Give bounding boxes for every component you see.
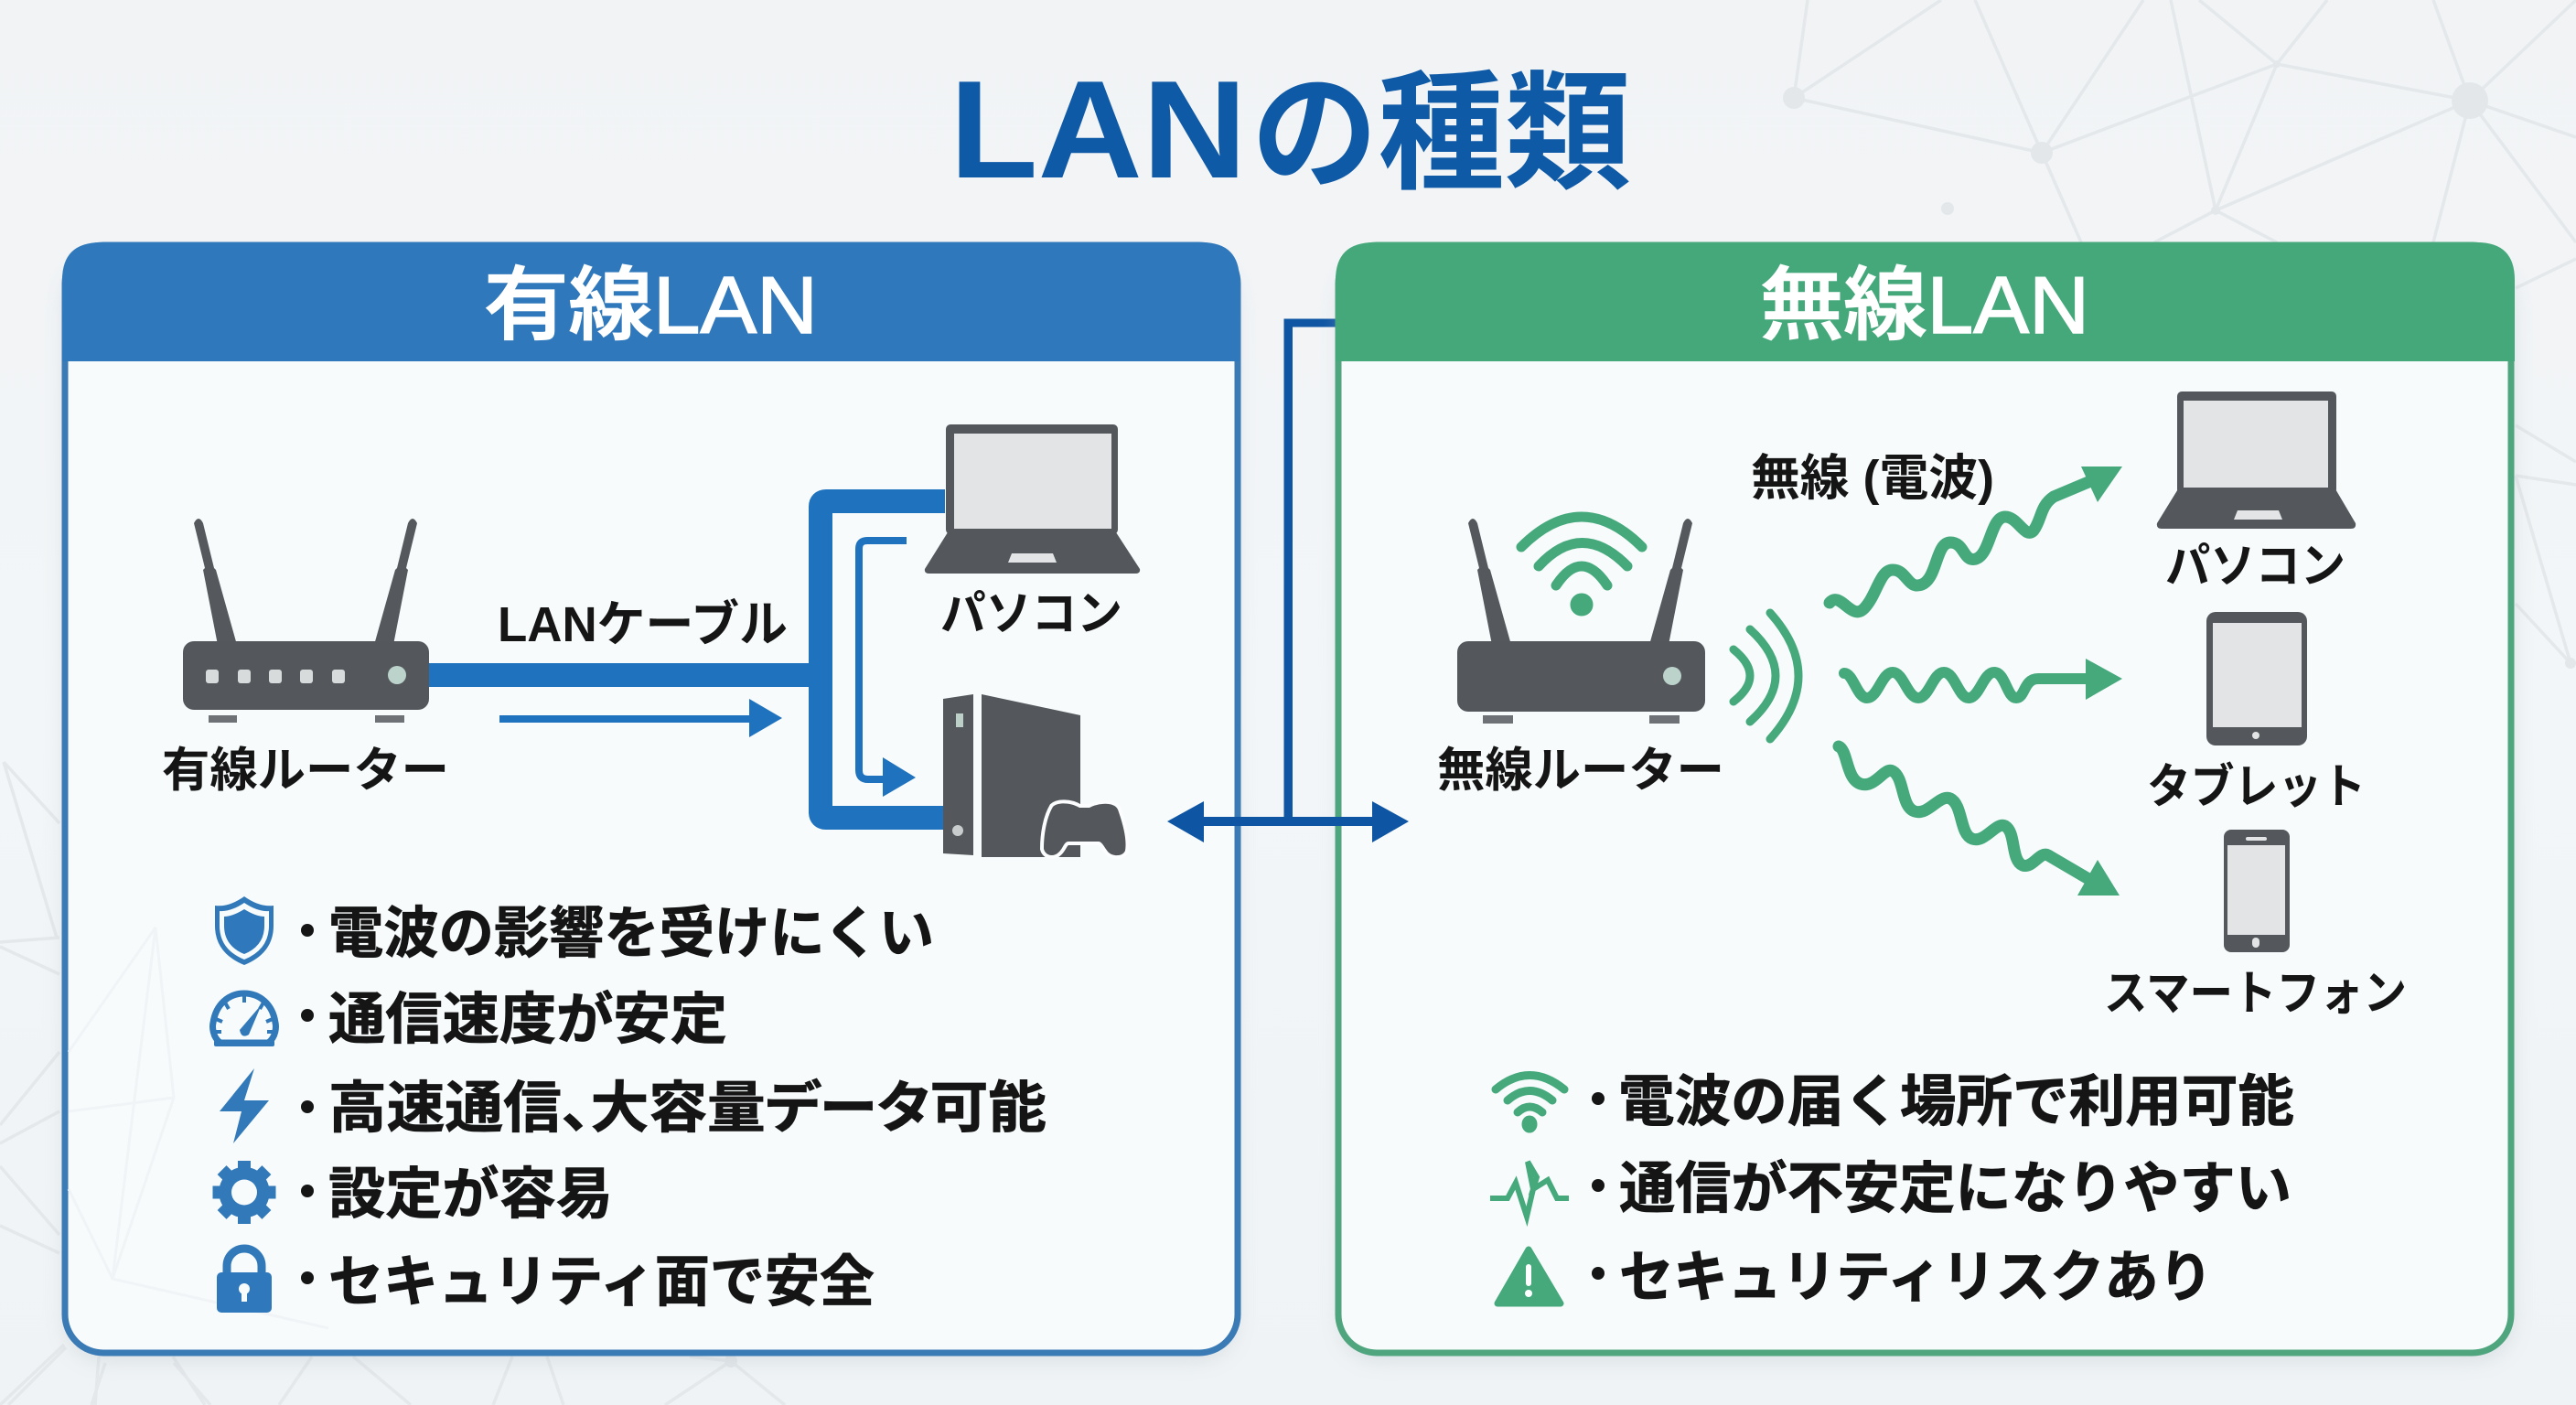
icon: warning triangle [1497, 1249, 1561, 1303]
cable direction arrow [499, 699, 782, 737]
connector between panels [1288, 323, 1337, 821]
label: PC: パソコン [940, 588, 1122, 641]
icon: padlock [217, 1249, 272, 1313]
list text: row 5: セキュリティ面で安全 [328, 1250, 875, 1313]
icon: lightning bolt [220, 1068, 269, 1143]
list text: row 2: 通信速度が安定 [328, 988, 727, 1050]
header: wired LAN [62, 242, 1240, 361]
icon: tablet [2206, 612, 2307, 745]
wavy arrow to laptop [1830, 467, 2122, 612]
icon: game console and controller [943, 694, 1126, 857]
icon: radio arcs from router [1733, 613, 1798, 739]
list text: row 2: 通信が不安定になりやすい [1619, 1157, 2292, 1219]
label: wireless router: 無線ルーター [1437, 745, 1724, 798]
icon: laptop [2157, 391, 2356, 529]
list text: row 1: 電波の届く場所で利用可能 [1618, 1070, 2294, 1132]
panel: wireless LAN [1336, 242, 2515, 1359]
double-headed arrow between panels [1167, 323, 1409, 842]
icon: gear [212, 1161, 276, 1224]
list text: row 3: セキュリティリスクあり [1619, 1246, 2213, 1308]
list text: row 1: 電波の影響を受けにくい [328, 902, 934, 964]
label: PC: パソコン [2165, 541, 2345, 594]
header: wired LAN: 有線LAN [484, 260, 818, 350]
inner branch arrow [859, 541, 916, 797]
title: の種類 [1251, 61, 1631, 207]
icon: smartphone [2224, 830, 2290, 952]
thick LAN cable [429, 501, 945, 818]
label: wired router: 有線ルーター [162, 745, 449, 798]
header: wireless LAN [1336, 242, 2515, 361]
icon: wired router [183, 519, 429, 723]
label: tablet: タブレット [2147, 761, 2366, 814]
icon: wireless router [1457, 519, 1705, 724]
header: wireless LAN: 無線LAN [1760, 260, 2089, 350]
wired feature list [212, 896, 1046, 1313]
list text: row 3: 高速通信、大容量データ可能 [328, 1077, 1046, 1139]
list text: row 4: 設定が容易 [328, 1163, 613, 1225]
wavy arrow to smartphone [1839, 746, 2120, 896]
label: LAN cable: LANケーブル [498, 597, 788, 652]
icon: wifi [1496, 1076, 1564, 1129]
icon: router wifi signal [1521, 517, 1642, 611]
icon: shield [215, 896, 274, 965]
wavy arrow to tablet [1844, 659, 2122, 700]
wireless feature list [1490, 1070, 2294, 1308]
label: radio waves: 無線 (電波) [1751, 451, 1994, 506]
icon: unstable signal [1490, 1162, 1569, 1217]
panel: wired LAN [62, 242, 1240, 1359]
icon: speedometer [213, 993, 275, 1046]
title [950, 52, 1631, 208]
label: smartphone: スマートフォン [2104, 968, 2407, 1021]
title: LAN [950, 52, 1247, 208]
icon: laptop [925, 424, 1140, 574]
